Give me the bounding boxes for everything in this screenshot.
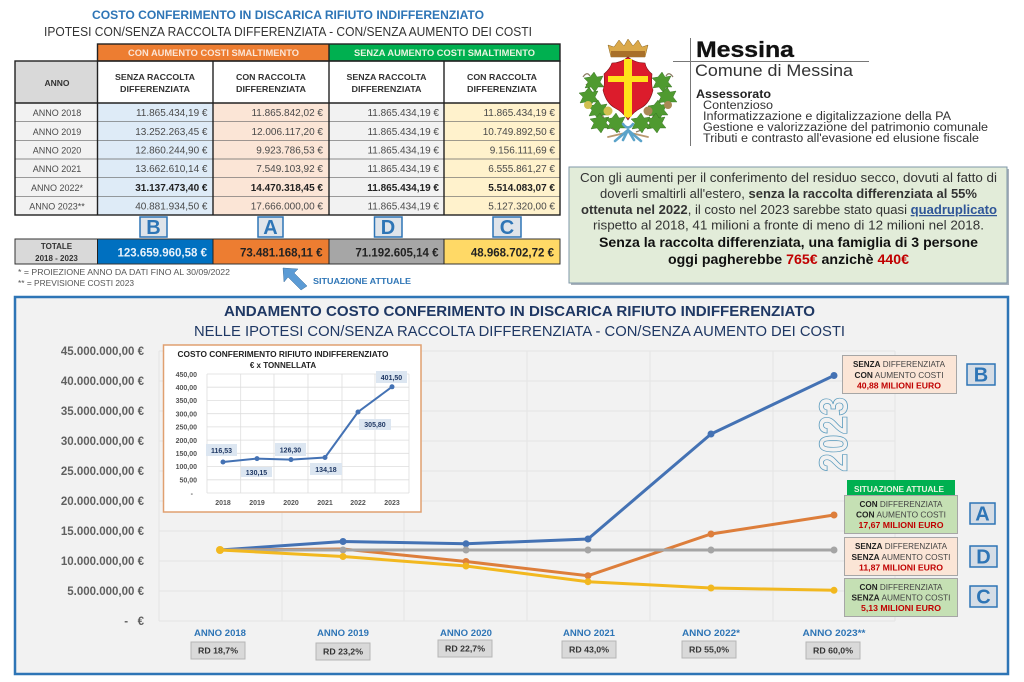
inset chart: cost per tonne: 2020 [283, 500, 299, 507]
inset chart: cost per tonne: 134,18 [315, 467, 337, 474]
panel: cost table: 11.865.434,19 € [367, 108, 439, 119]
panel: cost table: 6.555.861,27 € [488, 164, 555, 175]
inset chart: cost per tonne: 305,80 [364, 422, 386, 429]
panel: cost table: ANNO 2022* [31, 183, 84, 193]
panel: callout family cost: Senza la raccolta differenziata, una famiglia di 3 persone [599, 235, 979, 250]
inset chart: cost per tonne: 2018 [215, 500, 231, 507]
inset chart: cost per tonne: 400,00 [176, 385, 197, 392]
inset chart: cost per tonne: € x TONNELLATA [250, 361, 316, 370]
y axis labels: 10.000.000,00 € [61, 556, 145, 568]
label: situazione attuale: SITUAZIONE ATTUALE [313, 276, 411, 286]
y axis labels: 5.000.000,00 € [67, 586, 145, 598]
panel: cost table: 12.860.244,90 € [135, 146, 208, 156]
recycling rate tags [191, 640, 860, 660]
panel: cost table: 9.923.786,53 € [256, 146, 323, 156]
line: C con differenziata senza aumento [216, 546, 838, 594]
callout D: SENZA AUMENTO COSTI [852, 552, 950, 562]
y axis labels: 15.000.000,00 € [61, 526, 145, 538]
inset chart: cost per tonne [164, 345, 421, 512]
text block: assessorato [696, 89, 988, 145]
line: B senza differenziata con aumento [220, 372, 838, 550]
recycling rate tags: RD 43,0% [569, 644, 609, 654]
line: A con differenziata con aumento [220, 512, 838, 579]
column header: con aumento: CON AUMENTO COSTI SMALTIMENTO [128, 48, 299, 58]
panel: callout family cost: ottenuta nel 2022 , il costo nel 2023 sarebbe stato quasi quadruplicato [581, 203, 997, 217]
callout C: 5,13 MILIONI EURO [861, 603, 941, 613]
panel: cost table: 14.470.318,45 € [251, 183, 323, 194]
callout A: 17,67 MILIONI EURO [858, 520, 944, 530]
y axis labels: - € [124, 616, 145, 628]
line: D senza differenziata senza aumento [220, 546, 838, 554]
inset chart: cost per tonne: 2019 [249, 500, 265, 507]
tag C [970, 586, 997, 608]
y axis labels: 35.000.000,00 € [61, 406, 145, 418]
inset chart: cost per tonne: 300,00 [176, 412, 197, 418]
inset chart: cost per tonne: 350,00 [176, 398, 197, 405]
callout A: CON DIFFERENZIATA [860, 499, 943, 509]
tag B: B [974, 364, 988, 386]
totals row: 2018 - 2023 [35, 254, 78, 263]
panel: cost table: 11.865.434,19 € [367, 183, 439, 194]
x axis labels [194, 628, 866, 638]
inset chart: cost per tonne: 130,15 [246, 470, 267, 477]
chart heading: ANDAMENTO COSTO CONFERIMENTO IN DISCARICA RIFIUTO INDIFFERENZIATO [224, 303, 815, 320]
inset chart: cost per tonne: 250,00 [176, 424, 197, 432]
text block: assessorato: Tributi e contrasto all'evasione ed elusione fiscale [703, 133, 979, 145]
panel: cost table: 11.865.434,19 € [367, 146, 439, 156]
footnotes [18, 267, 230, 288]
callout B: CON AUMENTO COSTI [854, 370, 944, 380]
recycling rate tags: RD 18,7% [198, 646, 238, 656]
y axis labels: 30.000.000,00 € [61, 436, 145, 448]
icon: vine stems and tendrils [583, 74, 673, 132]
inset chart: cost per tonne: 2022 [350, 500, 366, 507]
x axis labels: ANNO 2020 [440, 628, 492, 638]
recycling rate tags: RD 22,7% [445, 644, 485, 654]
inset chart: cost per tonne: 150,00 [176, 451, 197, 458]
tag: situazione attuale [847, 480, 955, 496]
table letter tags: D [381, 217, 395, 239]
y axis labels: 25.000.000,00 € [61, 466, 145, 478]
callout D: SENZA DIFFERENZIATA [855, 541, 947, 551]
panel: cost table: 17.666.000,00 € [251, 202, 323, 212]
chart subheading: NELLE IPOTESI CON/SENZA RACCOLTA DIFFERENZIATA - CON/SENZA AUMENTO DEI COSTI [194, 323, 845, 340]
callout D: 11,87 MILIONI EURO [859, 562, 943, 572]
footnotes: * = PROIEZIONE ANNO DA DATI FINO AL 30/09/2022 [18, 267, 230, 277]
totals row: 48.968.702,72 € [471, 248, 555, 260]
panel: callout family cost [569, 167, 1009, 285]
callout C [844, 578, 958, 616]
panel: cost table: ANNO 2023** [29, 202, 85, 212]
panel: cost table: CON RACCOLTA [467, 72, 537, 82]
title: COSTO CONFERIMENTO IN DISCARICA RIFIUTO INDIFFERENZIATO [92, 8, 484, 22]
callout B: 40,88 MILIONI EURO [857, 380, 941, 390]
totals row [15, 239, 560, 264]
text block: assessorato: Informatizzazione e digitalizzazione della PA [703, 111, 951, 123]
x axis labels: ANNO 2023** [802, 628, 866, 638]
tag D: D [976, 546, 991, 568]
panel: cost table: DIFFERENZIATA [352, 84, 422, 94]
footnotes: ** = PREVISIONE COSTI 2023 [18, 278, 134, 288]
panel: cost table: 5.127.320,00 € [488, 202, 555, 212]
table letter tags: C [500, 217, 514, 239]
panel: cost table: 11.865.434,19 € [483, 108, 555, 119]
callout D [844, 538, 958, 576]
arrow: situazione attuale [283, 268, 307, 290]
tag C: C [976, 586, 991, 608]
tag A: A [975, 504, 990, 526]
callout A: CON AUMENTO COSTI [856, 510, 946, 520]
callout B [842, 356, 956, 394]
y axis labels: 40.000.000,00 € [61, 376, 145, 388]
table letter tags: B [146, 217, 161, 239]
panel: cost table: CON RACCOLTA [236, 72, 306, 82]
tag A [970, 503, 995, 526]
heading: Comune di Messina: Comune di Messina [695, 62, 854, 80]
panel: cost table: 13.252.263,45 € [135, 127, 208, 138]
chart grid [159, 351, 895, 621]
panel: cost table: 10.749.892,50 € [483, 127, 555, 138]
subtitle: IPOTESI CON/SENZA RACCOLTA DIFFERENZIATA - CON/SENZA AUMENTO DEI COSTI [44, 24, 532, 39]
panel: cost table: 5.514.083,07 € [488, 183, 555, 194]
inset chart: cost per tonne: 126,30 [280, 448, 301, 454]
x axis labels: ANNO 2021 [563, 628, 615, 638]
inset chart: cost per tonne: 2021 [317, 500, 333, 507]
icon: crown [608, 39, 648, 57]
panel: cost table: DIFFERENZIATA [236, 84, 306, 94]
totals row: 123.659.960,58 € [117, 248, 208, 260]
icon: grapes [584, 101, 672, 116]
panel: cost table: 40.881.934,50 € [135, 202, 208, 212]
panel: cost table: ANNO [44, 78, 70, 88]
panel: cost table: 11.865.434,19 € [136, 108, 208, 119]
table letter tags [140, 217, 521, 239]
heading: Messina: Messina [696, 37, 795, 62]
panel: cost table: 11.865.842,02 € [251, 108, 323, 119]
callout C: CON DIFFERENZIATA [860, 582, 943, 592]
y axis labels [61, 346, 145, 628]
inset chart: cost per tonne: 2023 [384, 500, 400, 507]
recycling rate tags: RD 60,0% [813, 646, 853, 656]
callout C: SENZA AUMENTO COSTI [852, 592, 950, 602]
panel: cost table [15, 44, 560, 215]
inset chart: cost per tonne: 401,50 [381, 375, 402, 382]
panel: cost table: DIFFERENZIATA [120, 84, 190, 94]
icon: coat of arms of Messina [579, 39, 677, 141]
panel: cost table: ANNO 2018 [33, 108, 81, 118]
callout B: SENZA DIFFERENZIATA [853, 359, 945, 369]
panel: cost table: 11.865.434,19 € [367, 202, 439, 212]
y axis labels: 45.000.000,00 € [61, 346, 145, 358]
icon: blue ribbon [608, 124, 648, 141]
totals row: 73.481.168,11 € [240, 248, 323, 260]
inset chart: cost per tonne: COSTO CONFERIMENTO RIFIUTO INDIFFERENZIATO [178, 350, 388, 359]
inset chart: cost per tonne: 100,00 [176, 464, 197, 471]
totals row: TOTALE [41, 242, 73, 251]
tag: situazione attuale: SITUAZIONE ATTUALE [854, 484, 944, 494]
panel: cost table: ANNO 2021 [33, 164, 81, 174]
y axis labels: 20.000.000,00 € [61, 496, 145, 508]
panel: cost table: SENZA RACCOLTA [115, 72, 195, 82]
text block: assessorato: Assessorato [696, 89, 771, 101]
panel: callout family cost: oggi pagherebbe 765€ anzichè 440€ [668, 252, 910, 267]
watermark year 2023: 2023 [812, 397, 856, 472]
panel: trend chart [15, 297, 1008, 674]
panel: callout family cost: doverli smaltirli all'estero, senza la raccolta differenziata al 55% [600, 187, 977, 201]
x axis labels: ANNO 2019 [317, 628, 369, 638]
inset chart: cost per tonne: 50,00 [179, 478, 197, 484]
panel: cost table: 12.006.117,20 € [251, 127, 323, 138]
inset chart: cost per tonne: - [191, 491, 194, 498]
panel: cost table: 11.865.434,19 € [367, 127, 439, 138]
tag D [970, 546, 997, 568]
panel: cost table: 9.156.111,69 € [490, 146, 555, 156]
recycling rate tags: RD 23,2% [323, 646, 363, 656]
text block: assessorato: Contenzioso [703, 100, 773, 112]
totals row: 71.192.605,14 € [355, 248, 439, 260]
tag B [967, 364, 995, 386]
panel: callout family cost: Con gli aumenti per il conferimento del residuo secco, dovuti al fatto di [580, 171, 997, 185]
panel: cost table: 13.662.610,14 € [135, 164, 208, 175]
table letter tags: A [263, 217, 278, 239]
logo divider lines [673, 38, 869, 146]
icon: vine leaves [579, 72, 677, 133]
recycling rate tags: RD 55,0% [689, 644, 729, 654]
column header: senza aumento: SENZA AUMENTO COSTI SMALTIMENTO [354, 48, 535, 58]
panel: callout family cost: rispetto al 2018, 41 milioni a fronte di meno di 12 milioni nel 2018. [593, 218, 984, 232]
panel: cost table: ANNO 2019 [33, 127, 81, 137]
inset chart: cost per tonne: 450,00 [176, 372, 197, 379]
panel: cost table: 7.549.103,92 € [256, 164, 323, 175]
panel: cost table: DIFFERENZIATA [467, 84, 537, 94]
inset chart: cost per tonne: 200,00 [176, 438, 197, 445]
panel: cost table: 11.865.434,19 € [367, 164, 439, 175]
panel: cost table: SENZA RACCOLTA [346, 72, 426, 82]
text block: assessorato: Gestione e valorizzazione del patrimonio comunale [703, 122, 988, 134]
x axis labels: ANNO 2022* [682, 628, 741, 638]
inset chart: cost per tonne: 116,53 [211, 448, 232, 455]
icon: yellow cross [608, 59, 648, 118]
panel: cost table: 31.137.473,40 € [135, 183, 208, 194]
callout A [844, 496, 958, 534]
x axis labels: ANNO 2018 [194, 628, 246, 638]
panel: cost table: ANNO 2020 [33, 146, 81, 156]
icon: shield [603, 57, 653, 120]
